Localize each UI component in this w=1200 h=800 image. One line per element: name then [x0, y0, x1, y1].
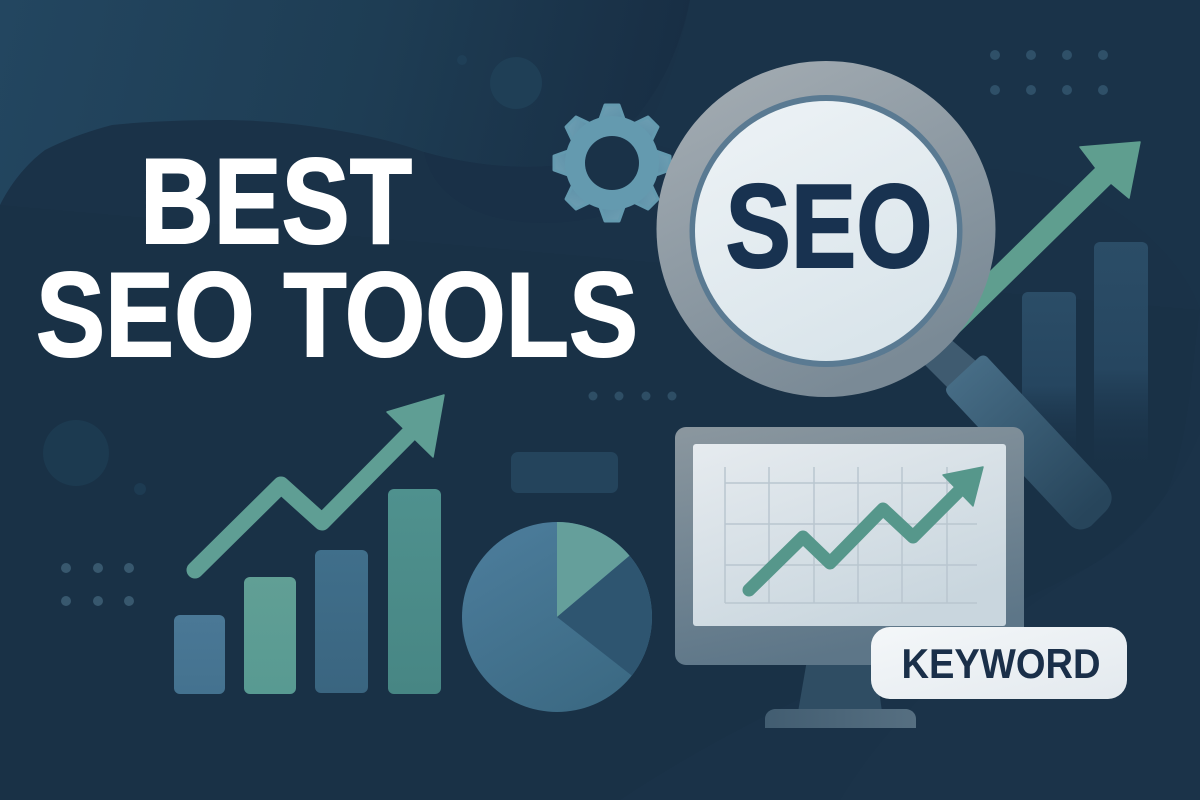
title — [36, 133, 638, 382]
magnifier lens — [695, 101, 957, 361]
background circle: top — [490, 57, 542, 109]
background circle: left — [43, 420, 109, 486]
monitor frame — [675, 427, 1024, 665]
background circle: top small — [457, 55, 467, 65]
decorative dots: left — [61, 563, 134, 606]
arrow: top right growth — [940, 142, 1140, 336]
magnifier handle — [915, 330, 1112, 529]
monitor screen — [693, 444, 1006, 626]
title: SEO TOOLS — [36, 248, 638, 382]
placeholder block — [511, 452, 618, 493]
monitor stand — [765, 660, 916, 728]
bar chart — [174, 489, 441, 694]
title: BEST — [140, 133, 412, 269]
magnifying glass — [656, 61, 1112, 529]
background circle: left small — [134, 483, 146, 495]
monitor — [675, 427, 1024, 728]
magnifier ring — [656, 61, 996, 397]
background bars: top right — [1022, 242, 1148, 472]
decorative dots: top right — [990, 50, 1108, 95]
screen grid — [725, 467, 977, 603]
arrow: bar chart growth — [195, 395, 444, 570]
decorative dots: middle — [588, 392, 676, 400]
pie chart — [462, 522, 652, 712]
keyword badge: KEYWORD — [902, 640, 1100, 687]
lens label: SEO — [726, 160, 932, 293]
keyword badge — [871, 627, 1127, 699]
icon: gear — [554, 105, 670, 221]
screen trend arrow — [749, 467, 983, 590]
